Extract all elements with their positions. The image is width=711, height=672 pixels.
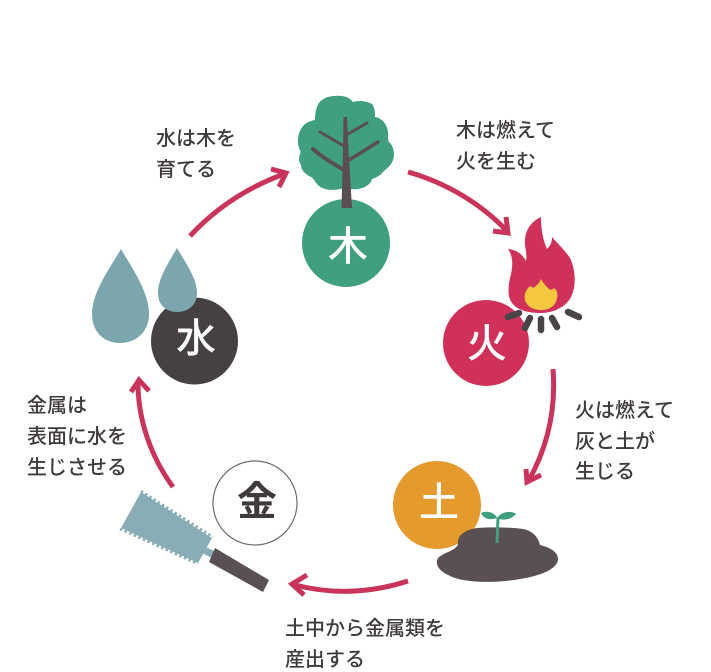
icon: saw handle — [209, 548, 269, 592]
icon: saw blade — [120, 491, 213, 564]
text: water nurtures wood: 育てる — [156, 158, 216, 181]
text: metal from earth: 産出する — [285, 648, 365, 671]
label: 火: 火 — [467, 322, 507, 366]
icon: flame — [508, 217, 575, 313]
wood element: tree and circle — [298, 96, 394, 287]
metal element: saw and circle — [120, 461, 297, 592]
icon: inner flame — [525, 279, 557, 310]
icon: small water drop — [158, 248, 197, 312]
arrow: earth to metal — [292, 575, 408, 595]
text: fire makes ash and earth: 灰と土が — [575, 430, 655, 453]
text: metal produces water: 生じさせる — [27, 456, 127, 479]
arrow: fire to earth — [526, 369, 554, 482]
circle: 木 — [302, 199, 390, 287]
icon: tree foliage — [298, 96, 394, 190]
text: wood burns to make fire: 木は燃えて — [456, 119, 555, 142]
earth element: soil, sprout and circle — [393, 461, 558, 582]
text: metal produces water: 金属は — [27, 394, 87, 417]
fire element: flame and circle — [443, 217, 579, 386]
arrow: wood to fire — [408, 172, 508, 233]
text: metal produces water: 表面に水を — [27, 425, 127, 448]
text: fire makes ash and earth: 火は燃えて — [575, 399, 674, 422]
icon: sprout stem — [497, 518, 498, 543]
text: metal from earth: 土中から金属類を — [285, 617, 445, 640]
icon: tree trunk and branches — [313, 117, 378, 208]
circle: 火 — [443, 300, 529, 386]
icon: large water drop — [92, 249, 149, 343]
arrow: metal to water — [131, 380, 173, 487]
label: 土: 土 — [419, 481, 459, 525]
water element: drops and circle — [92, 248, 238, 384]
icon: firewood logs — [508, 312, 579, 330]
label: 水: 水 — [176, 317, 216, 361]
icon: sprout left leaf — [481, 512, 497, 519]
text: fire makes ash and earth: 生じる — [575, 460, 635, 483]
icon: soil mound — [437, 527, 558, 582]
text: wood burns to make fire: 火を生む — [456, 150, 536, 173]
circle: 水 — [151, 298, 238, 384]
text: water nurtures wood: 水は木を — [156, 127, 236, 150]
circle: 土 — [393, 461, 481, 549]
label: 木: 木 — [328, 225, 368, 269]
icon: saw neck — [200, 546, 216, 558]
label: 金: 金 — [237, 480, 277, 524]
icon: sprout right leaf — [497, 512, 516, 520]
circle: 金 — [213, 461, 297, 545]
arrow: water to wood — [190, 169, 286, 236]
